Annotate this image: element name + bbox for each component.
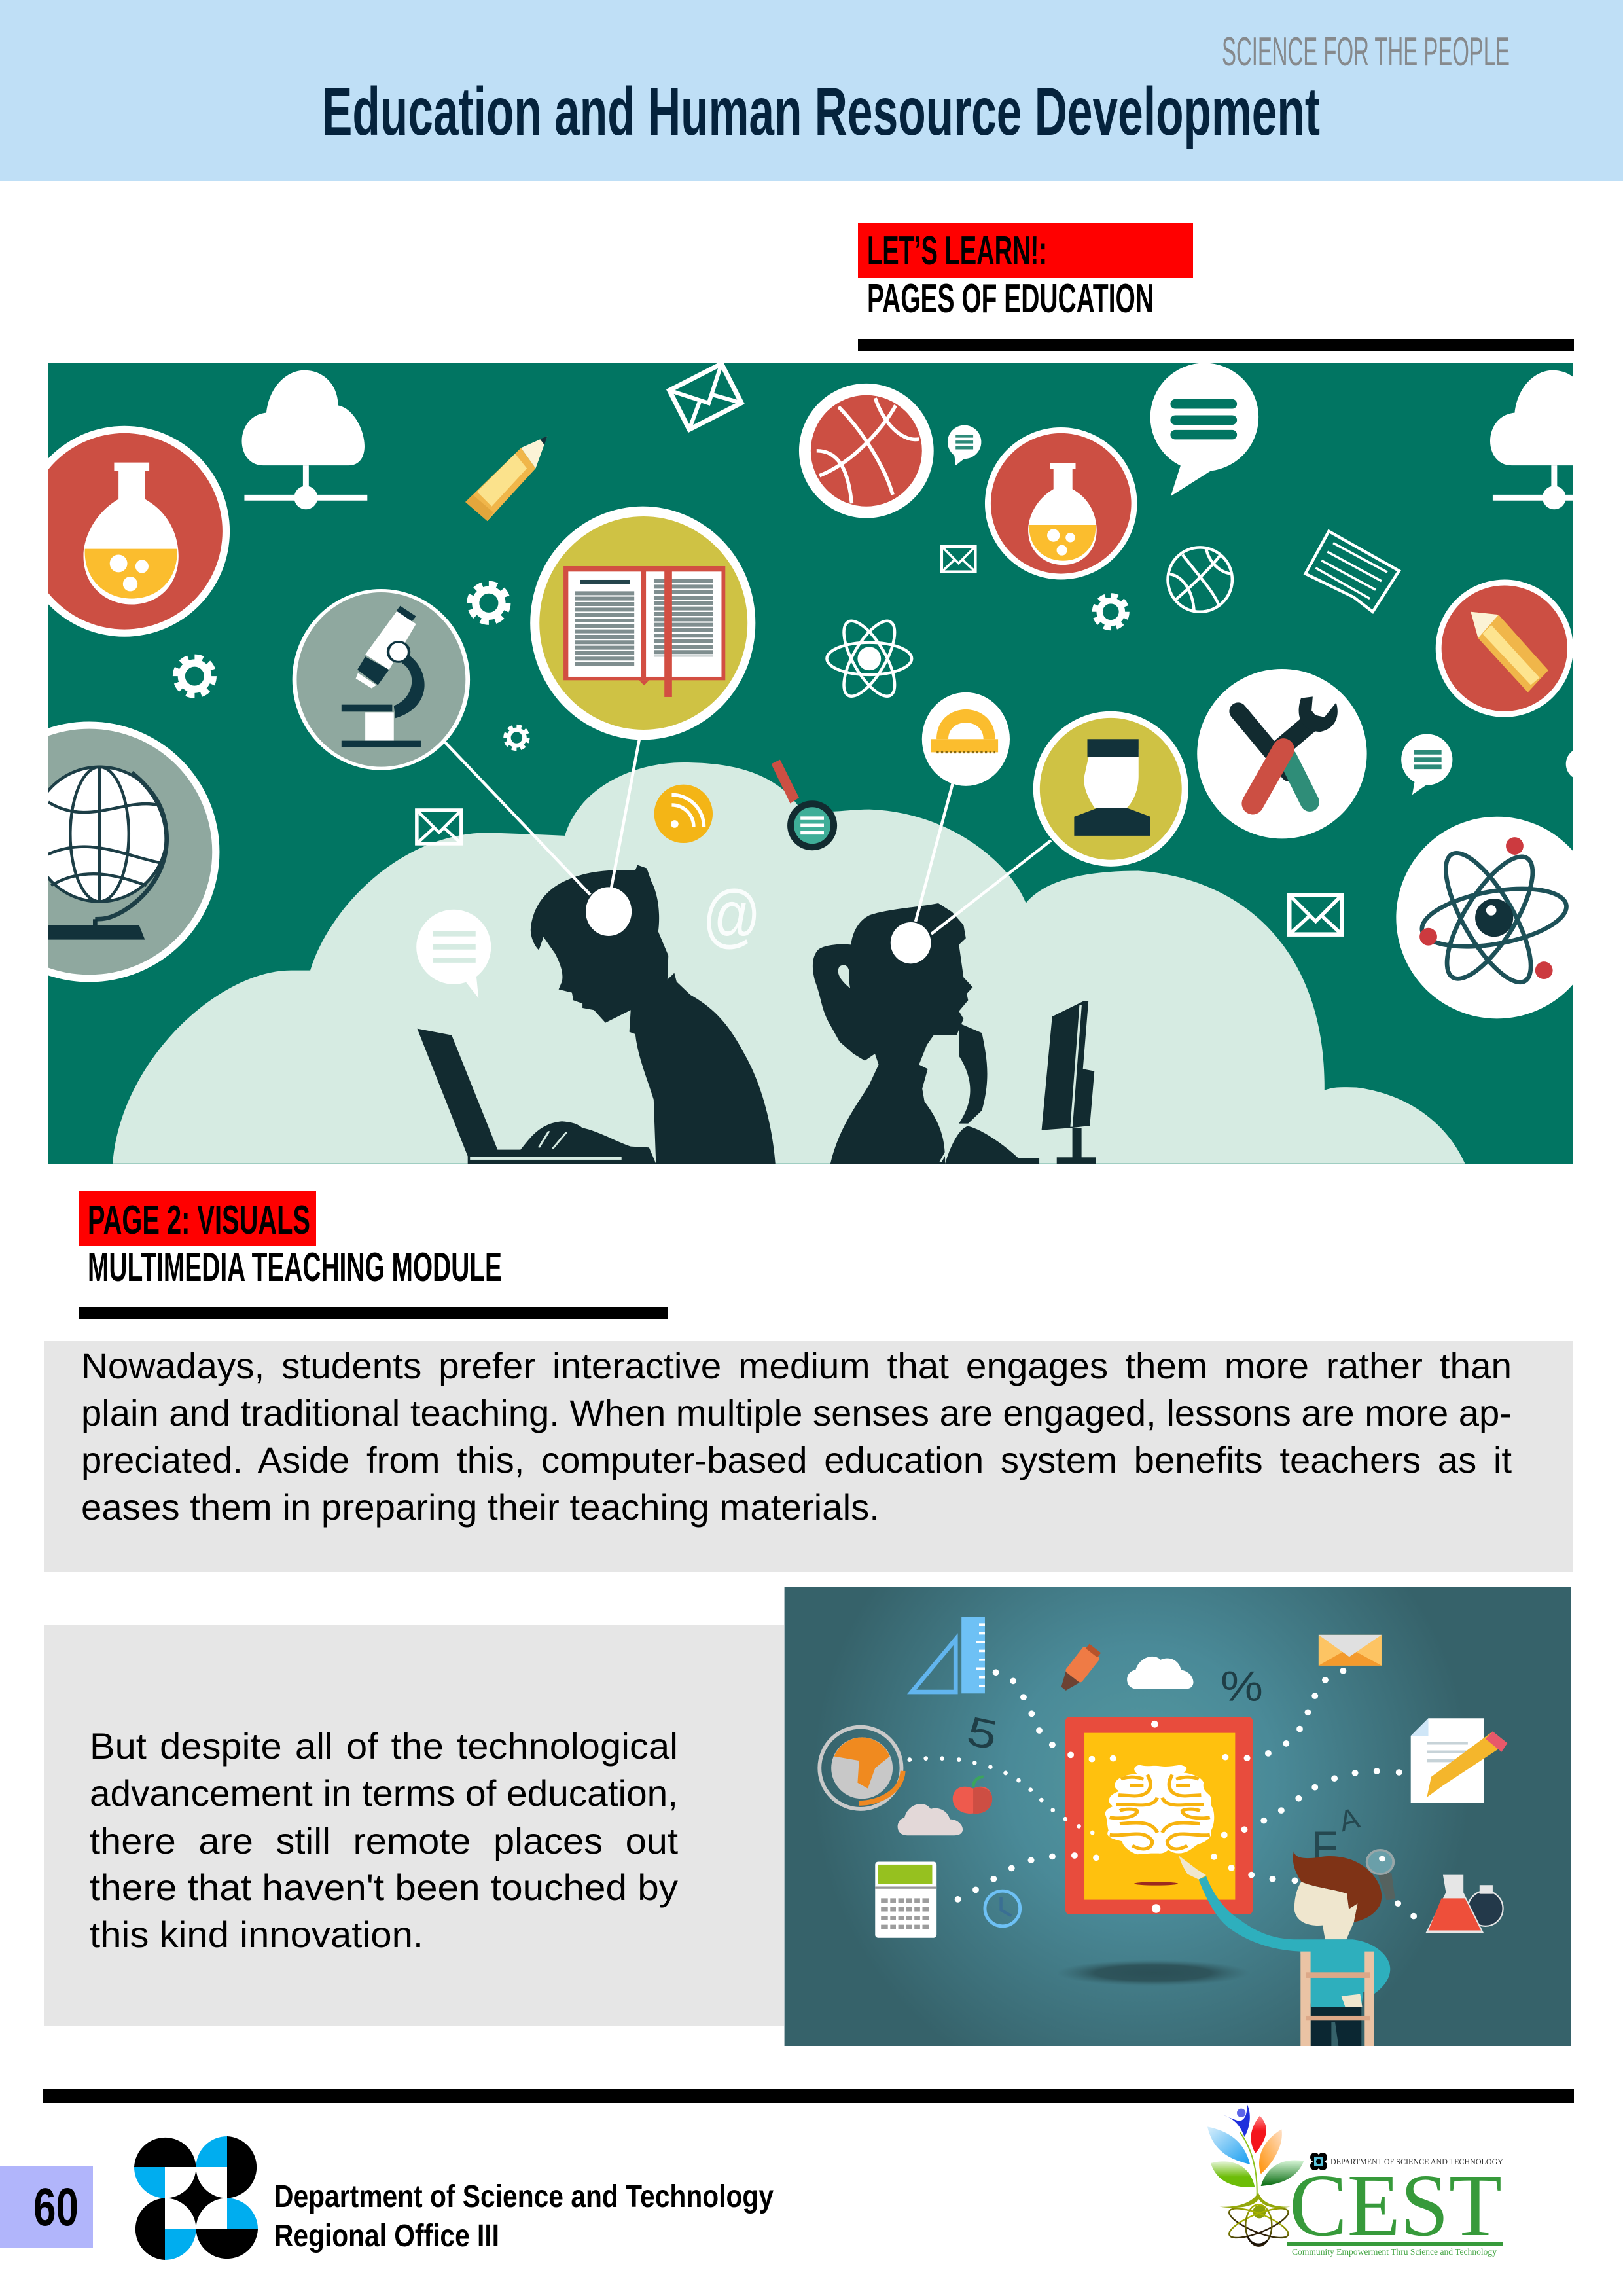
- icon: pencil: [465, 436, 547, 521]
- icon: grey cloud: [898, 1804, 963, 1835]
- icon: ball outline: [1168, 547, 1232, 612]
- icon: book outline: [1306, 531, 1399, 612]
- letters A and F: F: [1311, 1822, 1338, 1871]
- shadow: [1057, 1960, 1250, 1986]
- connecting dots: [908, 1668, 1417, 1919]
- department name: [274, 2179, 774, 2253]
- page number: 60: [33, 2178, 79, 2237]
- text panel: intro: preciated. Aside from this, computer-based education system benefits teachers as it: [81, 1439, 1512, 1480]
- number five: 5: [963, 1708, 1001, 1759]
- text panel: intro: plain and traditional teaching. When multiple senses are engaged, lessons are more ap-: [81, 1392, 1512, 1433]
- text panel: intro: Nowadays, students prefer interactive medium that engages them more rather than: [81, 1345, 1512, 1386]
- department name: Regional Office III: [274, 2219, 499, 2253]
- header band: [0, 0, 1623, 181]
- cloud backdrop: [113, 762, 1465, 1164]
- icon: clock: [985, 1891, 1020, 1926]
- icon: envelope outline: [669, 364, 741, 429]
- boy on ladder: [1179, 1851, 1390, 2049]
- icon: globe circle: [48, 721, 220, 982]
- brain: [1105, 1765, 1214, 1854]
- illustration: students and education icons: [0, 363, 1613, 1164]
- radial glow background: [785, 1587, 1572, 2046]
- icon: atom circle: [1396, 817, 1598, 1018]
- logo: CEST: DEPARTMENT OF SCIENCE AND TECHNOLOGY: [1330, 2157, 1504, 2166]
- icon: rss: [654, 785, 713, 843]
- icon: big chat bubble: [1150, 363, 1258, 496]
- page number: [0, 2166, 93, 2248]
- text panel: intro: eases them in preparing their teaching materials.: [81, 1486, 880, 1528]
- text panel: remote places: [44, 1625, 784, 2026]
- section heading: page 2 visuals: PAGE 2: VISUALS: [88, 1198, 310, 1243]
- section heading: let's learn: LET’S LEARN!:: [867, 228, 1047, 274]
- tablet: [1065, 1717, 1253, 1914]
- percent sign: %: [1221, 1662, 1263, 1710]
- letters A and F: [1311, 1802, 1363, 1871]
- icon: calculator: [875, 1861, 936, 1938]
- icon: person circle: [1033, 711, 1188, 867]
- logo: DOST: [134, 2136, 258, 2260]
- text panel: intro: [44, 1341, 1573, 1572]
- department name: Department of Science and Technology: [274, 2179, 774, 2214]
- text panel: remote places: But despite all of the technological: [90, 1725, 678, 1767]
- section heading: let's learn: PAGES OF EDUCATION: [867, 276, 1154, 321]
- icon: basketball circle: [799, 384, 934, 518]
- section heading: page 2 visuals: MULTIMEDIA TEACHING MODULE: [88, 1245, 502, 1290]
- text panel: remote places: there are still remote places out: [90, 1820, 678, 1861]
- gears: [176, 584, 1126, 749]
- right edge chat bit: [1566, 748, 1598, 780]
- icon: cloud network right: [1490, 370, 1573, 509]
- text panel: remote places: there that haven't been touched by: [90, 1867, 678, 1908]
- icon: protractor circle: [922, 692, 1010, 786]
- icon: flask circle: [48, 425, 230, 637]
- envelopes: [417, 810, 1342, 935]
- icon: cloud network left: [242, 370, 367, 509]
- plant emblem: [1207, 2103, 1304, 2246]
- icon: document and pencil: [1411, 1718, 1507, 1803]
- icon: small chat right: [1401, 734, 1452, 795]
- icon: globe ring: [819, 1727, 903, 1809]
- letters A and F: A: [1336, 1802, 1363, 1838]
- logo: CEST: CEST: [1289, 2157, 1502, 2255]
- icon: at sign: @: [702, 876, 761, 955]
- icon: set square and ruler: [912, 1617, 985, 1693]
- icon: book circle: [530, 507, 755, 740]
- logo: CEST: Community Empowerment Thru Science and Technology: [1292, 2248, 1497, 2257]
- footer rule: [43, 2089, 1574, 2103]
- girl silhouette with monitor: [813, 903, 1096, 1164]
- icon: magnifier: [771, 760, 837, 850]
- icon: flask circle 2: [985, 427, 1137, 580]
- icon: marker: [1056, 1642, 1103, 1695]
- logo: CEST: [1207, 2103, 1504, 2257]
- icon: white cloud: [1127, 1657, 1193, 1689]
- text panel: remote places: advancement in terms of education,: [90, 1772, 678, 1814]
- icon: flasks: [1425, 1875, 1503, 1933]
- icon: pale chat: [416, 910, 491, 998]
- icon: mail: [1319, 1635, 1382, 1666]
- icon: pencil circle: [1436, 580, 1573, 717]
- icon: microscope circle: [293, 589, 470, 770]
- boy silhouette with laptop: [418, 865, 776, 1164]
- icon: apple: [953, 1777, 992, 1814]
- magnifier behind boy: [1367, 1850, 1395, 1900]
- icon: small envelope: [942, 547, 975, 572]
- connector lines: [445, 739, 1051, 934]
- small dost mark: [1310, 2153, 1327, 2170]
- icon: atom outline: [827, 614, 912, 704]
- icon: tools circle: [1197, 669, 1367, 838]
- illustration: brain tablet: [785, 1587, 1572, 2049]
- icon: small chat: [948, 425, 981, 465]
- text panel: remote places: this kind innovation.: [90, 1914, 423, 1955]
- section heading: let's learn: [858, 223, 1574, 351]
- section heading: page 2 visuals: [79, 1191, 668, 1319]
